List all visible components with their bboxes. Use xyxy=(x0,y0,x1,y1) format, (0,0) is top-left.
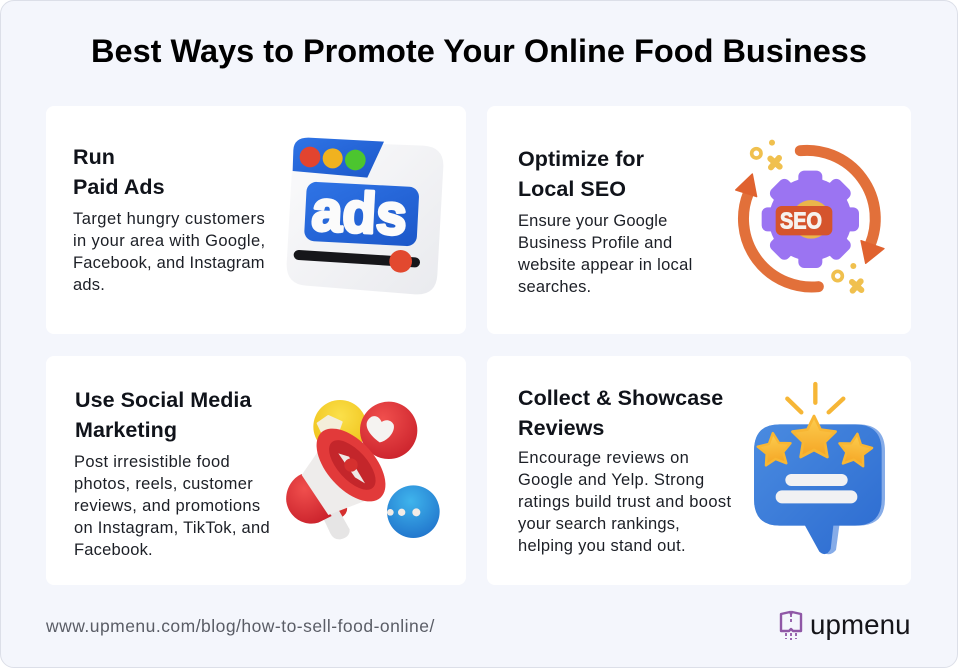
text: local seo description: website appear in local xyxy=(518,256,693,274)
heading: social media marketing xyxy=(75,388,252,442)
heading: reviews: Collect & Showcase xyxy=(518,386,723,410)
heading: local seo: Local SEO xyxy=(518,177,626,201)
text: reviews description: your search rankings, xyxy=(518,515,680,533)
panel: social media marketing xyxy=(46,356,466,585)
icon: ads window xyxy=(287,138,444,294)
heading: social media marketing: Marketing xyxy=(75,418,177,442)
panel: reviews xyxy=(487,356,911,585)
panel: local seo xyxy=(487,106,911,334)
text: local seo description: Ensure your Google xyxy=(518,212,667,230)
text: run paid ads description: ads. xyxy=(73,276,105,294)
text: local seo description: searches. xyxy=(518,278,591,296)
text: social media description: Facebook. xyxy=(74,541,153,559)
panel: run paid ads xyxy=(46,106,466,334)
title: Best Ways to Promote Your Online Food Business xyxy=(91,33,867,69)
heading: run paid ads: Run xyxy=(73,145,115,169)
text: social media description: reviews, and promotions xyxy=(74,497,260,515)
text: social media description: on Instagram, TikTok, and xyxy=(74,519,270,537)
icon: seo gear: SEO xyxy=(780,208,822,234)
text: run paid ads description: Target hungry customers xyxy=(73,210,265,228)
text: local seo description xyxy=(518,212,693,296)
text: run paid ads description: in your area with Google, xyxy=(73,232,265,250)
text: reviews description: helping you stand out. xyxy=(518,537,686,555)
text: reviews description: ratings build trust and boost xyxy=(518,493,731,511)
icon: review bubble xyxy=(754,382,885,554)
icon: ads window: ads xyxy=(310,179,409,248)
source url: www.upmenu.com/blog/how-to-sell-food-online/ xyxy=(46,616,435,636)
heading: local seo: Optimize for xyxy=(518,147,644,171)
text: local seo description: Business Profile and xyxy=(518,234,672,252)
text: social media description xyxy=(74,453,270,559)
logo wordmark: upmenu xyxy=(810,609,911,640)
heading: local seo xyxy=(518,147,644,201)
icon: logo book xyxy=(780,610,802,640)
heading: run paid ads xyxy=(73,145,165,199)
text: run paid ads description: Facebook, and Instagram xyxy=(73,254,265,272)
text: run paid ads description xyxy=(73,210,265,294)
text: reviews description xyxy=(518,449,731,555)
text: reviews description: Google and Yelp. Strong xyxy=(518,471,704,489)
icon: megaphone xyxy=(286,400,440,540)
logo: upmenu xyxy=(780,609,911,640)
heading: reviews: Reviews xyxy=(518,416,604,440)
text: social media description: Post irresistible food xyxy=(74,453,230,471)
heading: reviews xyxy=(518,386,723,440)
text: reviews description: Encourage reviews on xyxy=(518,449,689,467)
heading: social media marketing: Use Social Media xyxy=(75,388,251,412)
text: social media description: photos, reels, customer xyxy=(74,475,253,493)
heading: run paid ads: Paid Ads xyxy=(73,175,165,199)
icon: seo gear xyxy=(735,140,885,294)
